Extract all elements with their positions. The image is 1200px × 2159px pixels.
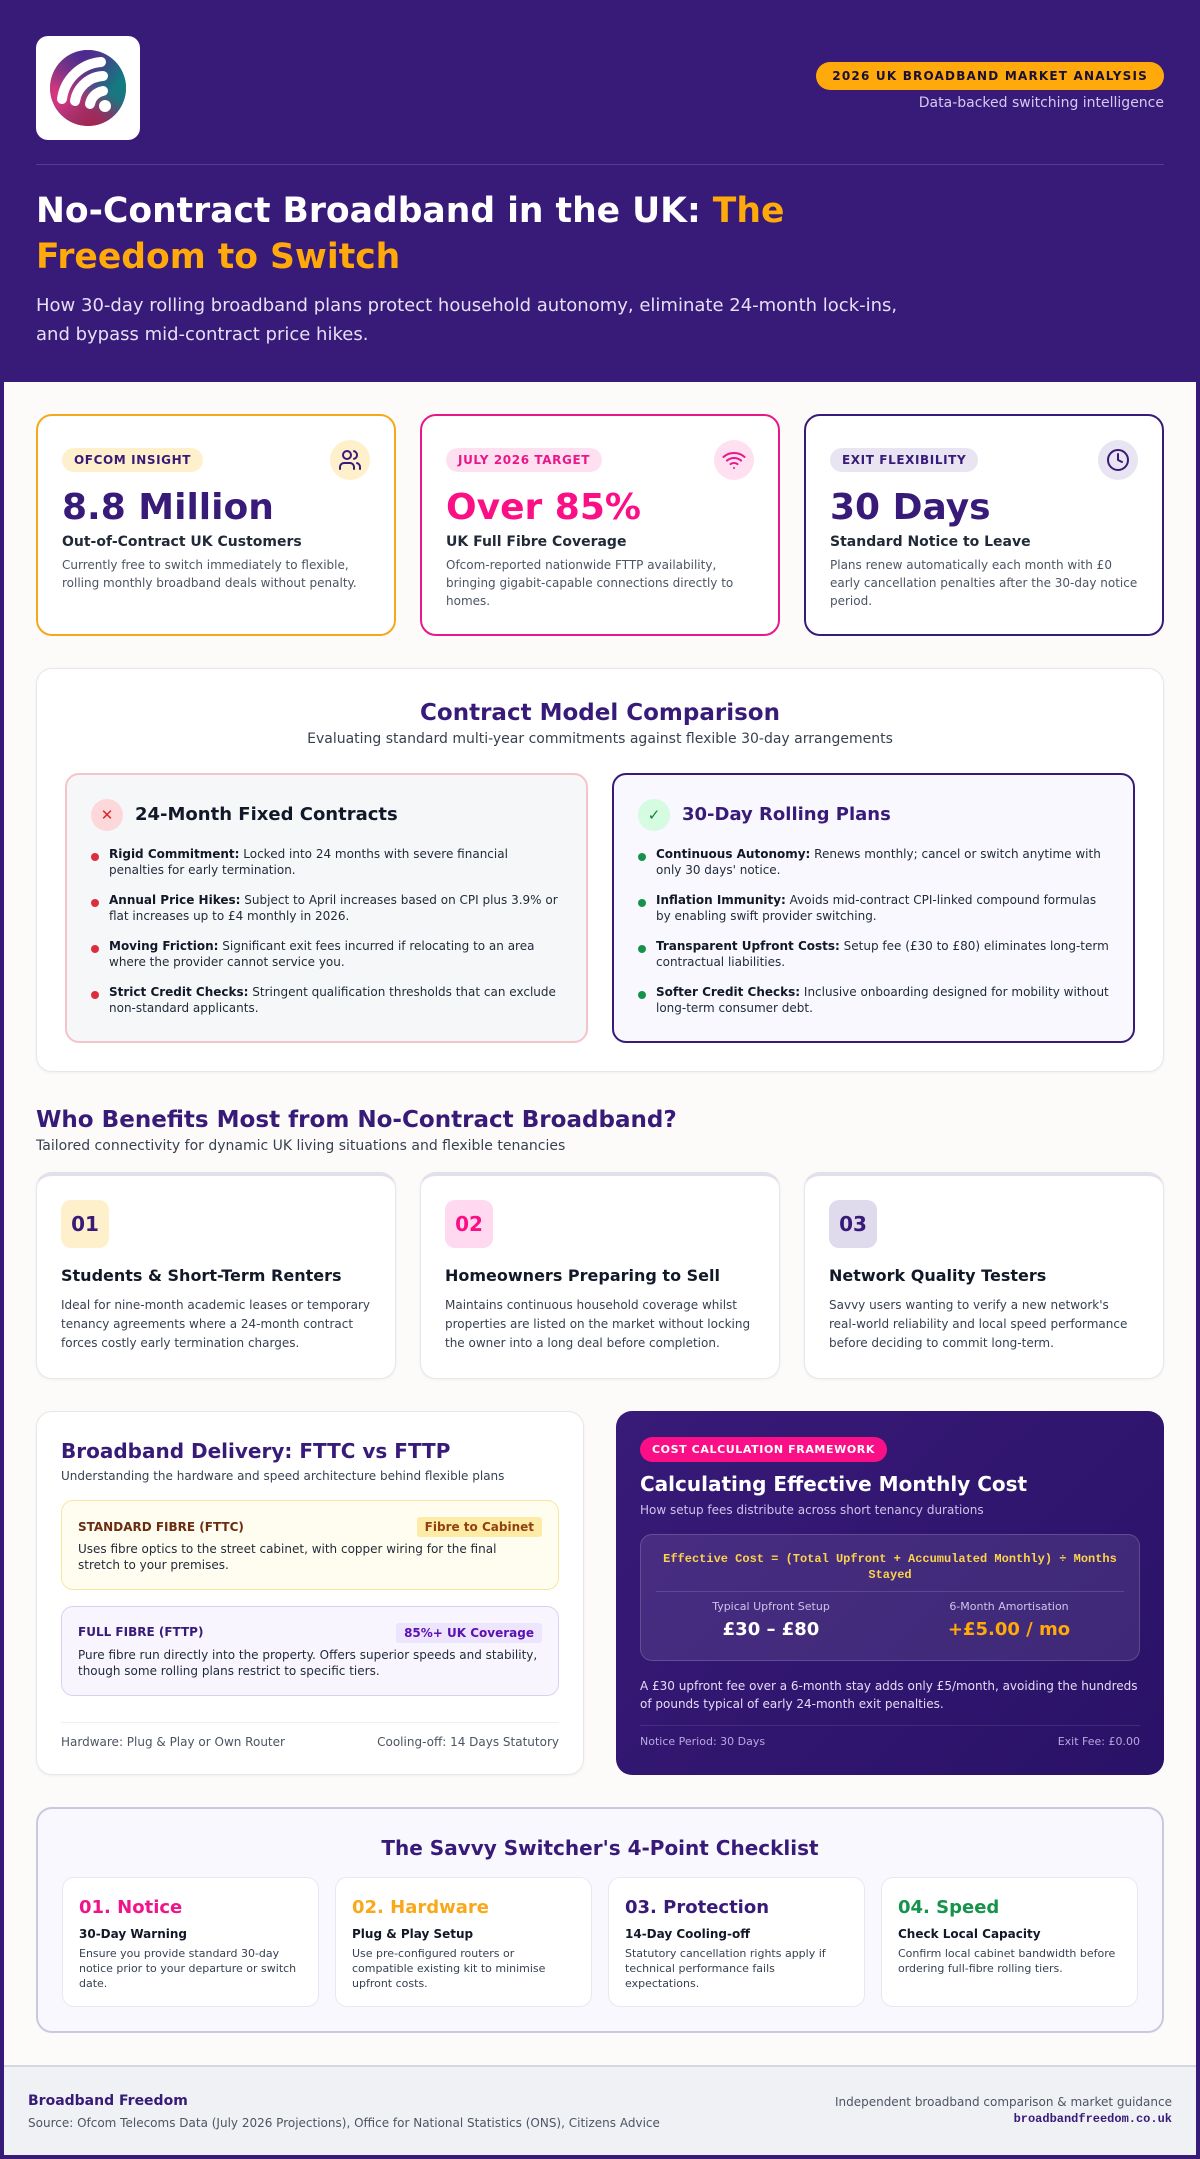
- market analysis pill: [816, 62, 1164, 90]
- bullet: softer credit checks: Softer Credit Checks: Inclusive onboarding designed for mobility without: [656, 985, 1109, 999]
- footer source: Source: Ofcom Telecoms Data (July 2026 Projections), Office for National Statistics (ONS), Citizens Advice: [28, 2116, 660, 2130]
- icon: cross: [91, 799, 123, 831]
- box text: Uses fibre optics to the street cabinet, with copper wiring for the final: [78, 1542, 496, 1556]
- header subtitle: [36, 295, 897, 345]
- step text: compatible existing kit to minimise: [352, 1962, 545, 1975]
- card title: Homeowners Preparing to Sell: [445, 1266, 720, 1285]
- card text: Maintains continuous household coverage whilst: [445, 1298, 737, 1312]
- icon: people: [330, 440, 370, 480]
- panel footer: [640, 1725, 1140, 1755]
- icon: cross: ✕: [101, 806, 113, 824]
- box: standard fibre: [61, 1500, 559, 1590]
- panel: homeowners preparing to sell: [420, 1172, 780, 1379]
- badge: JULY 2026 TARGET: [458, 453, 590, 467]
- formula: Effective Cost = (Total Upfront + Accumulated Monthly) ÷ Months Stayed: [663, 1552, 1117, 1582]
- number badge: [445, 1200, 493, 1248]
- bullet list: [638, 847, 1109, 1015]
- bullet: annual price hikes: Annual Price Hikes: Subject to April increases based on CPI plus 3.9% or: [109, 893, 558, 907]
- number badge: 01: [71, 1212, 99, 1236]
- number badge: [61, 1200, 109, 1248]
- box text: though some rolling plans restrict to specific tiers.: [78, 1664, 380, 1678]
- bullet: inflation immunity: by enabling swift provider switching.: [656, 909, 877, 923]
- statistic: Over 85%: [446, 487, 641, 528]
- footer brand: Broadband Freedom: [28, 2093, 188, 2109]
- bullet: annual price hikes: [91, 893, 558, 923]
- section subheading: Evaluating standard multi-year commitments against flexible 30-day arrangements: [307, 731, 893, 747]
- step text: date.: [79, 1977, 107, 1990]
- bullet: strict credit checks: Strict Credit Checks: Stringent qualification thresholds that can exclude: [109, 985, 556, 999]
- badge: [640, 1437, 887, 1462]
- exit fee: Exit Fee: £0.00: [1058, 1735, 1140, 1748]
- badge: EXIT FLEXIBILITY: [842, 453, 966, 467]
- panel: 24-month fixed contracts: [65, 773, 588, 1043]
- number badge: [829, 1200, 877, 1248]
- bullet: moving friction: where the provider cannot service you.: [109, 955, 345, 969]
- icon: check: ✓: [648, 806, 660, 824]
- stat description: Currently free to switch immediately to flexible, rolling monthly broadband deals without penalty.: [62, 558, 357, 590]
- box label: STANDARD FIBRE (FTTC): [78, 1520, 244, 1534]
- heading: checklist: The Savvy Switcher's 4-Point Checklist: [381, 1836, 819, 1860]
- card text: forces costly early termination charges.: [61, 1336, 299, 1350]
- section heading: Contract Model Comparison: [420, 700, 780, 726]
- explanation: of pounds typical of early 24-month exit penalties.: [640, 1697, 944, 1711]
- market analysis pill: 2026 UK BROADBAND MARKET ANALYSIS: [832, 69, 1148, 83]
- stat title: Out-of-Contract UK Customers: [62, 534, 302, 550]
- header divider: [36, 164, 1164, 165]
- stat description: Plans renew automatically each month with £0 early cancellation penalties after the 30-day notice period.: [830, 558, 1137, 608]
- bullet: inflation immunity: [638, 893, 1096, 923]
- statistic: 30 Days: [830, 487, 991, 528]
- number badge: 03: [839, 1212, 867, 1236]
- stat title: UK Full Fibre Coverage: [446, 534, 626, 550]
- panel: broadband delivery FTTC vs FTTP: [36, 1411, 584, 1775]
- stat description: Ofcom-reported nationwide FTTP availability, bringing gigabit-capable connections directly to homes.: [446, 558, 733, 608]
- card text: real-world reliability and local speed performance: [829, 1317, 1127, 1331]
- formula box: [640, 1534, 1140, 1661]
- bullet: softer credit checks: long-term consumer debt.: [656, 1001, 813, 1015]
- panel: stat card Ofcom insight: [36, 414, 396, 636]
- panel: stat card July 2026 target: [420, 414, 780, 636]
- card title: Network Quality Testers: [829, 1266, 1046, 1285]
- icon: clock: [1098, 440, 1138, 480]
- badge: [62, 448, 203, 472]
- panel: students and short-term renters: [36, 1172, 396, 1379]
- bullet: continuous autonomy: only 30 days' notice.: [656, 863, 780, 877]
- icon: wifi logo: [50, 50, 126, 126]
- card text: [61, 1298, 370, 1350]
- panel title: Calculating Effective Monthly Cost: [640, 1472, 1027, 1496]
- bullet: transparent upfront costs: contractual liabilities.: [656, 955, 785, 969]
- number badge: 02: [455, 1212, 483, 1236]
- panel: 4-point checklist: [36, 1807, 1164, 2033]
- icon: wifi: [714, 440, 754, 480]
- card text: tenancy agreements where a 24-month contract: [61, 1317, 353, 1331]
- step text: Statutory cancellation rights apply if: [625, 1947, 826, 1960]
- cooling-off note: Cooling-off: 14 Days Statutory: [377, 1735, 559, 1749]
- card text: Savvy users wanting to verify a new network's: [829, 1298, 1109, 1312]
- bullet: annual price hikes: flat increases up to £4 monthly in 2026.: [109, 909, 349, 923]
- metric value: +£5.00 / mo: [948, 1619, 1070, 1640]
- tag: Fibre to Cabinet: [425, 1520, 534, 1534]
- panel title: Broadband Delivery: FTTC vs FTTP: [61, 1439, 450, 1463]
- card title: Students & Short-Term Renters: [61, 1266, 342, 1285]
- card text: properties are listed on the market without locking: [445, 1317, 750, 1331]
- metric: upfront setup: [712, 1600, 830, 1640]
- metric label: Typical Upfront Setup: [712, 1600, 830, 1613]
- panel: contract model comparison: [36, 668, 1164, 1072]
- box text: stretch to your premises.: [78, 1558, 229, 1572]
- heading: who benefits: Who Benefits Most from No-Contract Broadband?: [36, 1107, 677, 1133]
- panel: stat card exit flexibility: [804, 414, 1164, 636]
- metric: amortisation: [948, 1600, 1070, 1640]
- step heading: 03. Protection: [625, 1897, 769, 1918]
- step text: Confirm local cabinet bandwidth before: [898, 1947, 1115, 1960]
- hardware note: Hardware: Plug & Play or Own Router: [61, 1735, 285, 1749]
- step heading: 02. Hardware: [352, 1897, 489, 1918]
- bullet: moving friction: Moving Friction: Significant exit fees incurred if relocating to an area: [109, 939, 534, 953]
- explanation: [640, 1679, 1138, 1711]
- bullet: moving friction: [91, 939, 534, 969]
- card text: the owner into a long deal before completion.: [445, 1336, 720, 1350]
- badge: COST CALCULATION FRAMEWORK: [652, 1443, 875, 1456]
- bullet: softer credit checks: [638, 985, 1109, 1015]
- badge: [446, 448, 602, 472]
- bullet: rigid commitment: Rigid Commitment: Locked into 24 months with severe financial: [109, 847, 508, 861]
- step text: Use pre-configured routers or: [352, 1947, 514, 1960]
- icon: check: [638, 799, 670, 831]
- bullet: inflation immunity: Inflation Immunity: Avoids mid-contract CPI-linked compound formulas: [656, 893, 1096, 907]
- step title: 14-Day Cooling-off: [625, 1927, 750, 1941]
- panel subtitle: Understanding the hardware and speed architecture behind flexible plans: [61, 1469, 504, 1483]
- metric value: £30 – £80: [723, 1619, 819, 1640]
- box text: [78, 1648, 537, 1678]
- header tagline: Data-backed switching intelligence: [919, 95, 1164, 111]
- card text: [829, 1298, 1127, 1350]
- bullet: strict credit checks: [91, 985, 556, 1015]
- bullet: continuous autonomy: Continuous Autonomy: Renews monthly; cancel or switch anytime with: [656, 847, 1101, 861]
- bullet list: [91, 847, 558, 1015]
- step heading: 01. Notice: [79, 1897, 182, 1918]
- bullet: continuous autonomy: [638, 847, 1101, 877]
- tag: 85%+ UK Coverage: [404, 1626, 534, 1640]
- header subtitle: How 30-day rolling broadband plans protect household autonomy, eliminate 24-month lock-ins,: [36, 295, 897, 316]
- step text: [898, 1947, 1115, 1975]
- bullet: transparent upfront costs: [638, 939, 1109, 969]
- box: full fibre: [61, 1606, 559, 1696]
- column title: 24-Month Fixed Contracts: [135, 804, 398, 825]
- header band: [0, 0, 1200, 382]
- explanation: A £30 upfront fee over a 6-month stay adds only £5/month, avoiding the hundreds: [640, 1679, 1138, 1693]
- panel footer: [61, 1722, 559, 1752]
- footer tagline: Independent broadband comparison & market guidance: [835, 2095, 1172, 2109]
- subheading: who benefits: Tailored connectivity for dynamic UK living situations and flexible tenancies: [36, 1138, 565, 1154]
- main title: No-Contract Broadband in the UK: The Freedom to Switch: [36, 191, 784, 277]
- box text: Pure fibre run directly into the property. Offers superior speeds and stability,: [78, 1648, 537, 1662]
- step title: 30-Day Warning: [79, 1927, 187, 1941]
- checklist card: notice: [62, 1877, 319, 2007]
- checklist card: hardware: [335, 1877, 592, 2007]
- bullet: transparent upfront costs: Transparent Upfront Costs: Setup fee (£30 to £80) eliminates long-term: [656, 939, 1109, 953]
- card text: before deciding to commit long-term.: [829, 1336, 1054, 1350]
- step text: technical performance fails: [625, 1962, 775, 1975]
- badge: [830, 448, 978, 472]
- panel: cost calculation framework: [616, 1411, 1164, 1775]
- bullet: rigid commitment: [91, 847, 508, 877]
- column title: 30-Day Rolling Plans: [682, 804, 891, 825]
- panel: network quality testers: [804, 1172, 1164, 1379]
- step title: Plug & Play Setup: [352, 1927, 473, 1941]
- panel subtitle: How setup fees distribute across short tenancy durations: [640, 1503, 984, 1517]
- step text: [625, 1947, 826, 1990]
- step text: ordering full-fibre rolling tiers.: [898, 1962, 1063, 1975]
- step title: Check Local Capacity: [898, 1927, 1041, 1941]
- checklist card: protection: [608, 1877, 865, 2007]
- tag: [417, 1517, 542, 1537]
- box label: FULL FIBRE (FTTP): [78, 1625, 203, 1639]
- formula divider: [656, 1591, 1124, 1592]
- notice period: Notice Period: 30 Days: [640, 1735, 765, 1748]
- bullet: strict credit checks: non-standard applicants.: [109, 1001, 259, 1015]
- step text: Ensure you provide standard 30-day: [79, 1947, 279, 1960]
- tag: [396, 1623, 542, 1643]
- logo tile: [36, 36, 140, 140]
- footer: [0, 2065, 1200, 2159]
- metric label: 6-Month Amortisation: [949, 1600, 1069, 1613]
- stat title: Standard Notice to Leave: [830, 534, 1031, 550]
- footer url: broadbandfreedom.co.uk: [1014, 2112, 1172, 2126]
- step text: expectations.: [625, 1977, 699, 1990]
- step text: upfront costs.: [352, 1977, 428, 1990]
- panel: 30-day rolling plans: [612, 773, 1135, 1043]
- bullet: rigid commitment: penalties for early termination.: [109, 863, 296, 877]
- step heading: 04. Speed: [898, 1897, 999, 1918]
- statistic: 8.8 Million: [62, 487, 274, 528]
- step text: [79, 1947, 296, 1990]
- step text: [352, 1947, 545, 1990]
- badge: OFCOM INSIGHT: [74, 453, 191, 467]
- header subtitle: and bypass mid-contract price hikes.: [36, 324, 368, 345]
- card text: [445, 1298, 750, 1350]
- box text: [78, 1542, 496, 1572]
- step text: notice prior to your departure or switch: [79, 1962, 296, 1975]
- checklist card: speed: [881, 1877, 1138, 2007]
- card text: Ideal for nine-month academic leases or temporary: [61, 1298, 370, 1312]
